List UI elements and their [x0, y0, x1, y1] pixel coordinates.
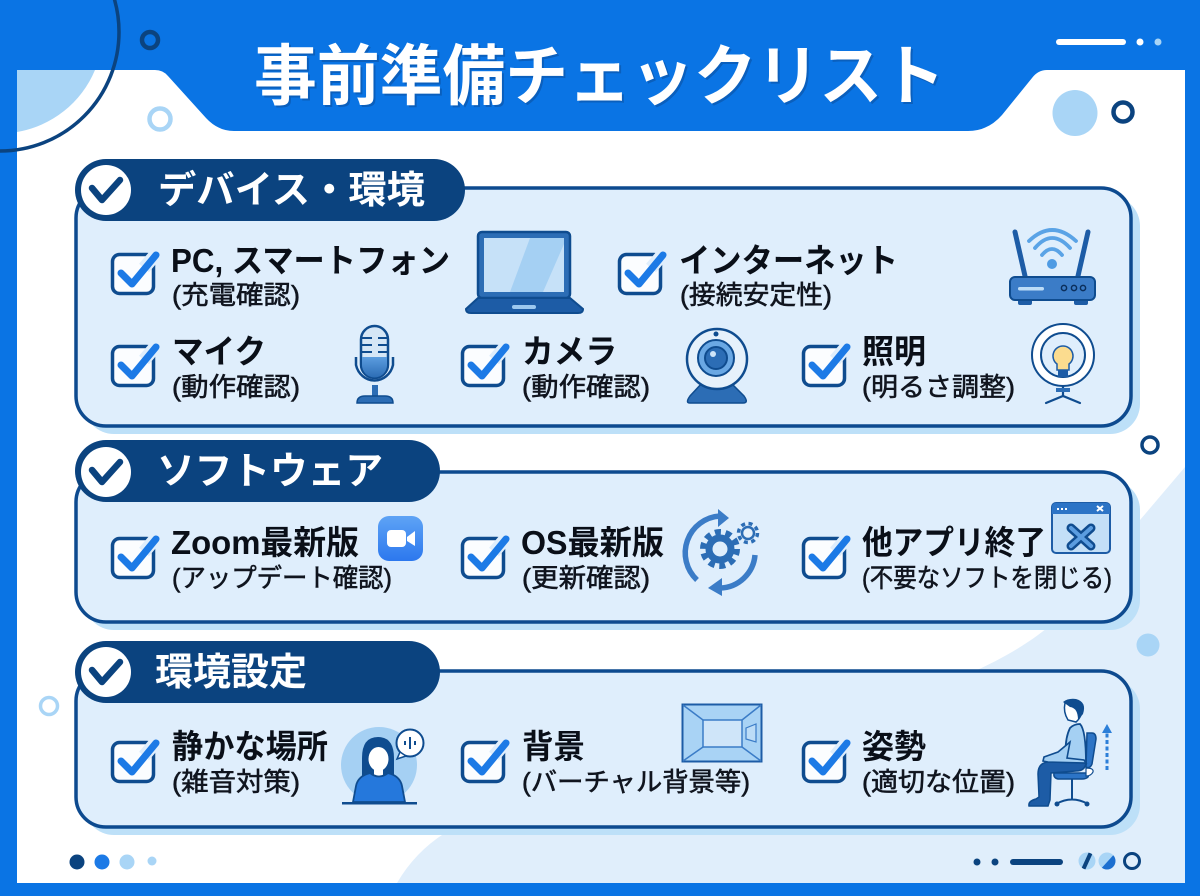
decoration: top left circles: [0, 0, 170, 151]
item: posture: [804, 728, 1015, 797]
item: OS: (更新確認): [522, 563, 650, 593]
icon: update gears: [685, 509, 758, 596]
item: internet: [620, 242, 898, 310]
tab heading: device: デバイス・環境: [158, 169, 425, 212]
icon: window close: [1052, 503, 1110, 553]
tab heading: software: ソフトウェア: [157, 451, 383, 493]
item: posture: 姿勢: [862, 728, 926, 765]
item: mic: [112, 333, 300, 402]
title: 事前準備チェックリスト: [256, 41, 947, 115]
item: mic: (動作確認): [172, 372, 300, 402]
item: camera: [462, 333, 650, 402]
tab heading: settings: 環境設定: [155, 652, 307, 694]
item: PC: PC, スマートフォン: [171, 242, 450, 279]
item: internet: (接続安定性): [680, 280, 832, 310]
item: camera: カメラ: [522, 333, 617, 370]
item: background: (バーチャル背景等): [522, 767, 750, 797]
decoration: side circles: [40, 437, 1160, 714]
item: PC: (充電確認): [172, 280, 300, 310]
title: 事前準備チェックリスト: [254, 39, 945, 113]
icon: laptop: [466, 232, 583, 313]
decoration: bottom left dots: [70, 854, 156, 870]
item: lighting: (明るさ調整): [862, 372, 1015, 402]
item: camera: (動作確認): [522, 372, 650, 402]
item: quiet place: (雑音対策): [172, 767, 300, 797]
icon: ring light: [1032, 324, 1094, 403]
icon: seated person: [1029, 699, 1112, 806]
item: background: [462, 728, 750, 797]
item: OS: OS最新版: [521, 524, 664, 561]
item: close apps: [804, 524, 1112, 593]
icon: webcam: [687, 329, 747, 403]
item: Zoom: (アップデート確認): [172, 563, 392, 593]
item: Zoom: [112, 524, 392, 593]
item: Zoom: Zoom最新版: [171, 524, 359, 561]
panel: software: [75, 440, 1140, 630]
item: lighting: [804, 333, 1015, 402]
item: internet: インターネット: [679, 242, 898, 279]
item: close apps: (不要なソフトを閉じる): [862, 563, 1112, 593]
item: lighting: 照明: [862, 333, 926, 370]
item: PC: [112, 242, 450, 310]
background blob: [397, 467, 1185, 883]
item: quiet place: 静かな場所: [172, 728, 328, 765]
item: background: 背景: [522, 728, 585, 765]
icon: microphone: [356, 326, 393, 403]
item: posture: (適切な位置): [862, 767, 1015, 797]
icon: Zoom camera: [378, 516, 423, 561]
panel: environment settings: [75, 641, 1140, 835]
tab heading: settings: [75, 641, 440, 703]
item: OS: [462, 524, 664, 593]
item: mic: マイク: [172, 333, 266, 370]
decoration: bottom right dots: [974, 852, 1141, 870]
decoration: top right: [1052, 38, 1162, 136]
icon: virtual background room: [682, 704, 762, 762]
tab heading: software: [75, 440, 440, 502]
icon: router: [1010, 230, 1095, 305]
tab heading: device: [75, 159, 465, 221]
panel: device and environment: [75, 159, 1140, 434]
item: quiet place: [112, 728, 328, 797]
icon: person with speech bubble: [341, 727, 424, 804]
item: close apps: 他アプリ終了: [862, 524, 1046, 561]
